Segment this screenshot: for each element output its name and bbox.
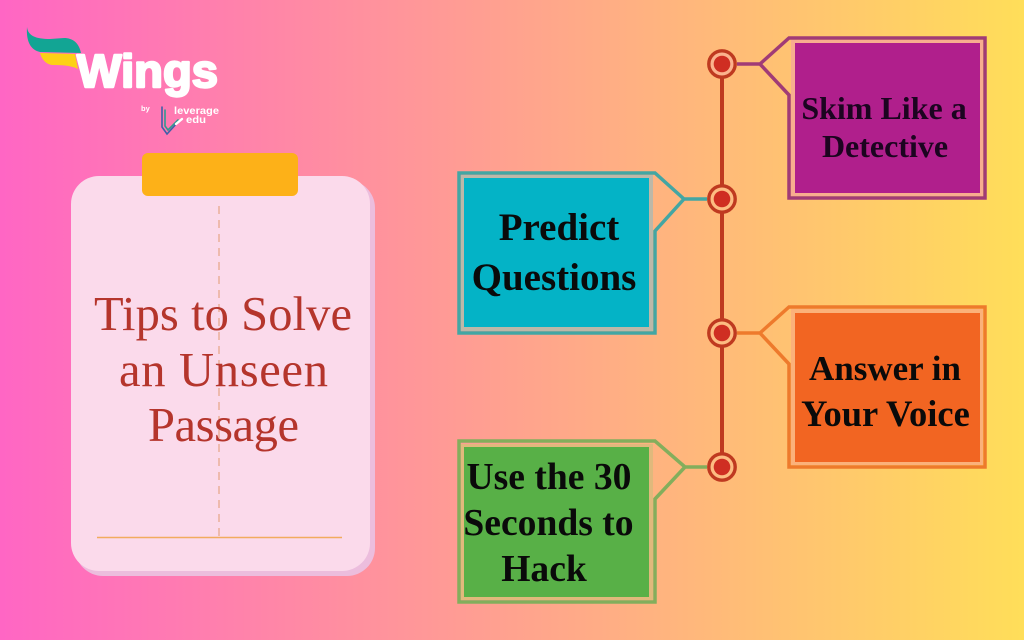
label: Skim Like a xyxy=(801,90,967,126)
title: Passage xyxy=(148,399,299,452)
callout: Use the 30 Seconds to Hack: Hack xyxy=(501,549,587,590)
label: Answer in xyxy=(809,349,961,388)
baseline rule xyxy=(97,536,342,538)
node: second xyxy=(709,186,735,212)
icon: yellow wing xyxy=(40,53,78,69)
dashed centre line xyxy=(218,206,220,537)
clipboard shadow xyxy=(75,180,375,576)
title: Tips to Solve xyxy=(94,288,352,341)
connector and frame xyxy=(737,38,985,198)
wordmark: Wings xyxy=(77,45,218,97)
node: top xyxy=(709,51,735,77)
title xyxy=(94,288,352,452)
callout: Use the 30 Seconds to Hack: Seconds to xyxy=(463,503,634,544)
connector and frame xyxy=(459,441,707,602)
clip tab xyxy=(142,153,298,196)
icon: teal wing xyxy=(27,27,81,53)
callout: Predict Questions xyxy=(459,173,707,333)
logo: Wings by Leverage Edu: edu xyxy=(186,115,206,126)
timeline spine xyxy=(720,64,724,467)
label: Predict xyxy=(499,206,619,249)
callout: Skim Like a Detective xyxy=(737,38,985,198)
label: Use the 30 xyxy=(467,457,631,498)
by label: by xyxy=(141,104,151,113)
node: bottom xyxy=(709,454,735,480)
callout: Answer in Your Voice xyxy=(737,307,985,467)
title: an Unseen xyxy=(119,344,328,397)
clipboard sheet xyxy=(71,176,370,571)
node: third xyxy=(709,320,735,346)
callout: Skim Like a Detective: Detective xyxy=(822,128,948,164)
callout: Answer in Your Voice: Your Voice xyxy=(801,393,970,434)
panel: clipboard note xyxy=(71,153,375,576)
callout: Use the 30 Seconds to Hack xyxy=(459,441,707,602)
connector and frame xyxy=(737,307,985,467)
logo: Wings by Leverage Edu xyxy=(27,27,219,134)
connector and frame xyxy=(459,173,707,333)
callout: Predict Questions: Questions xyxy=(472,256,636,299)
leverage edu text: leverage xyxy=(174,106,219,117)
icon: leverage edu mark xyxy=(162,107,182,134)
